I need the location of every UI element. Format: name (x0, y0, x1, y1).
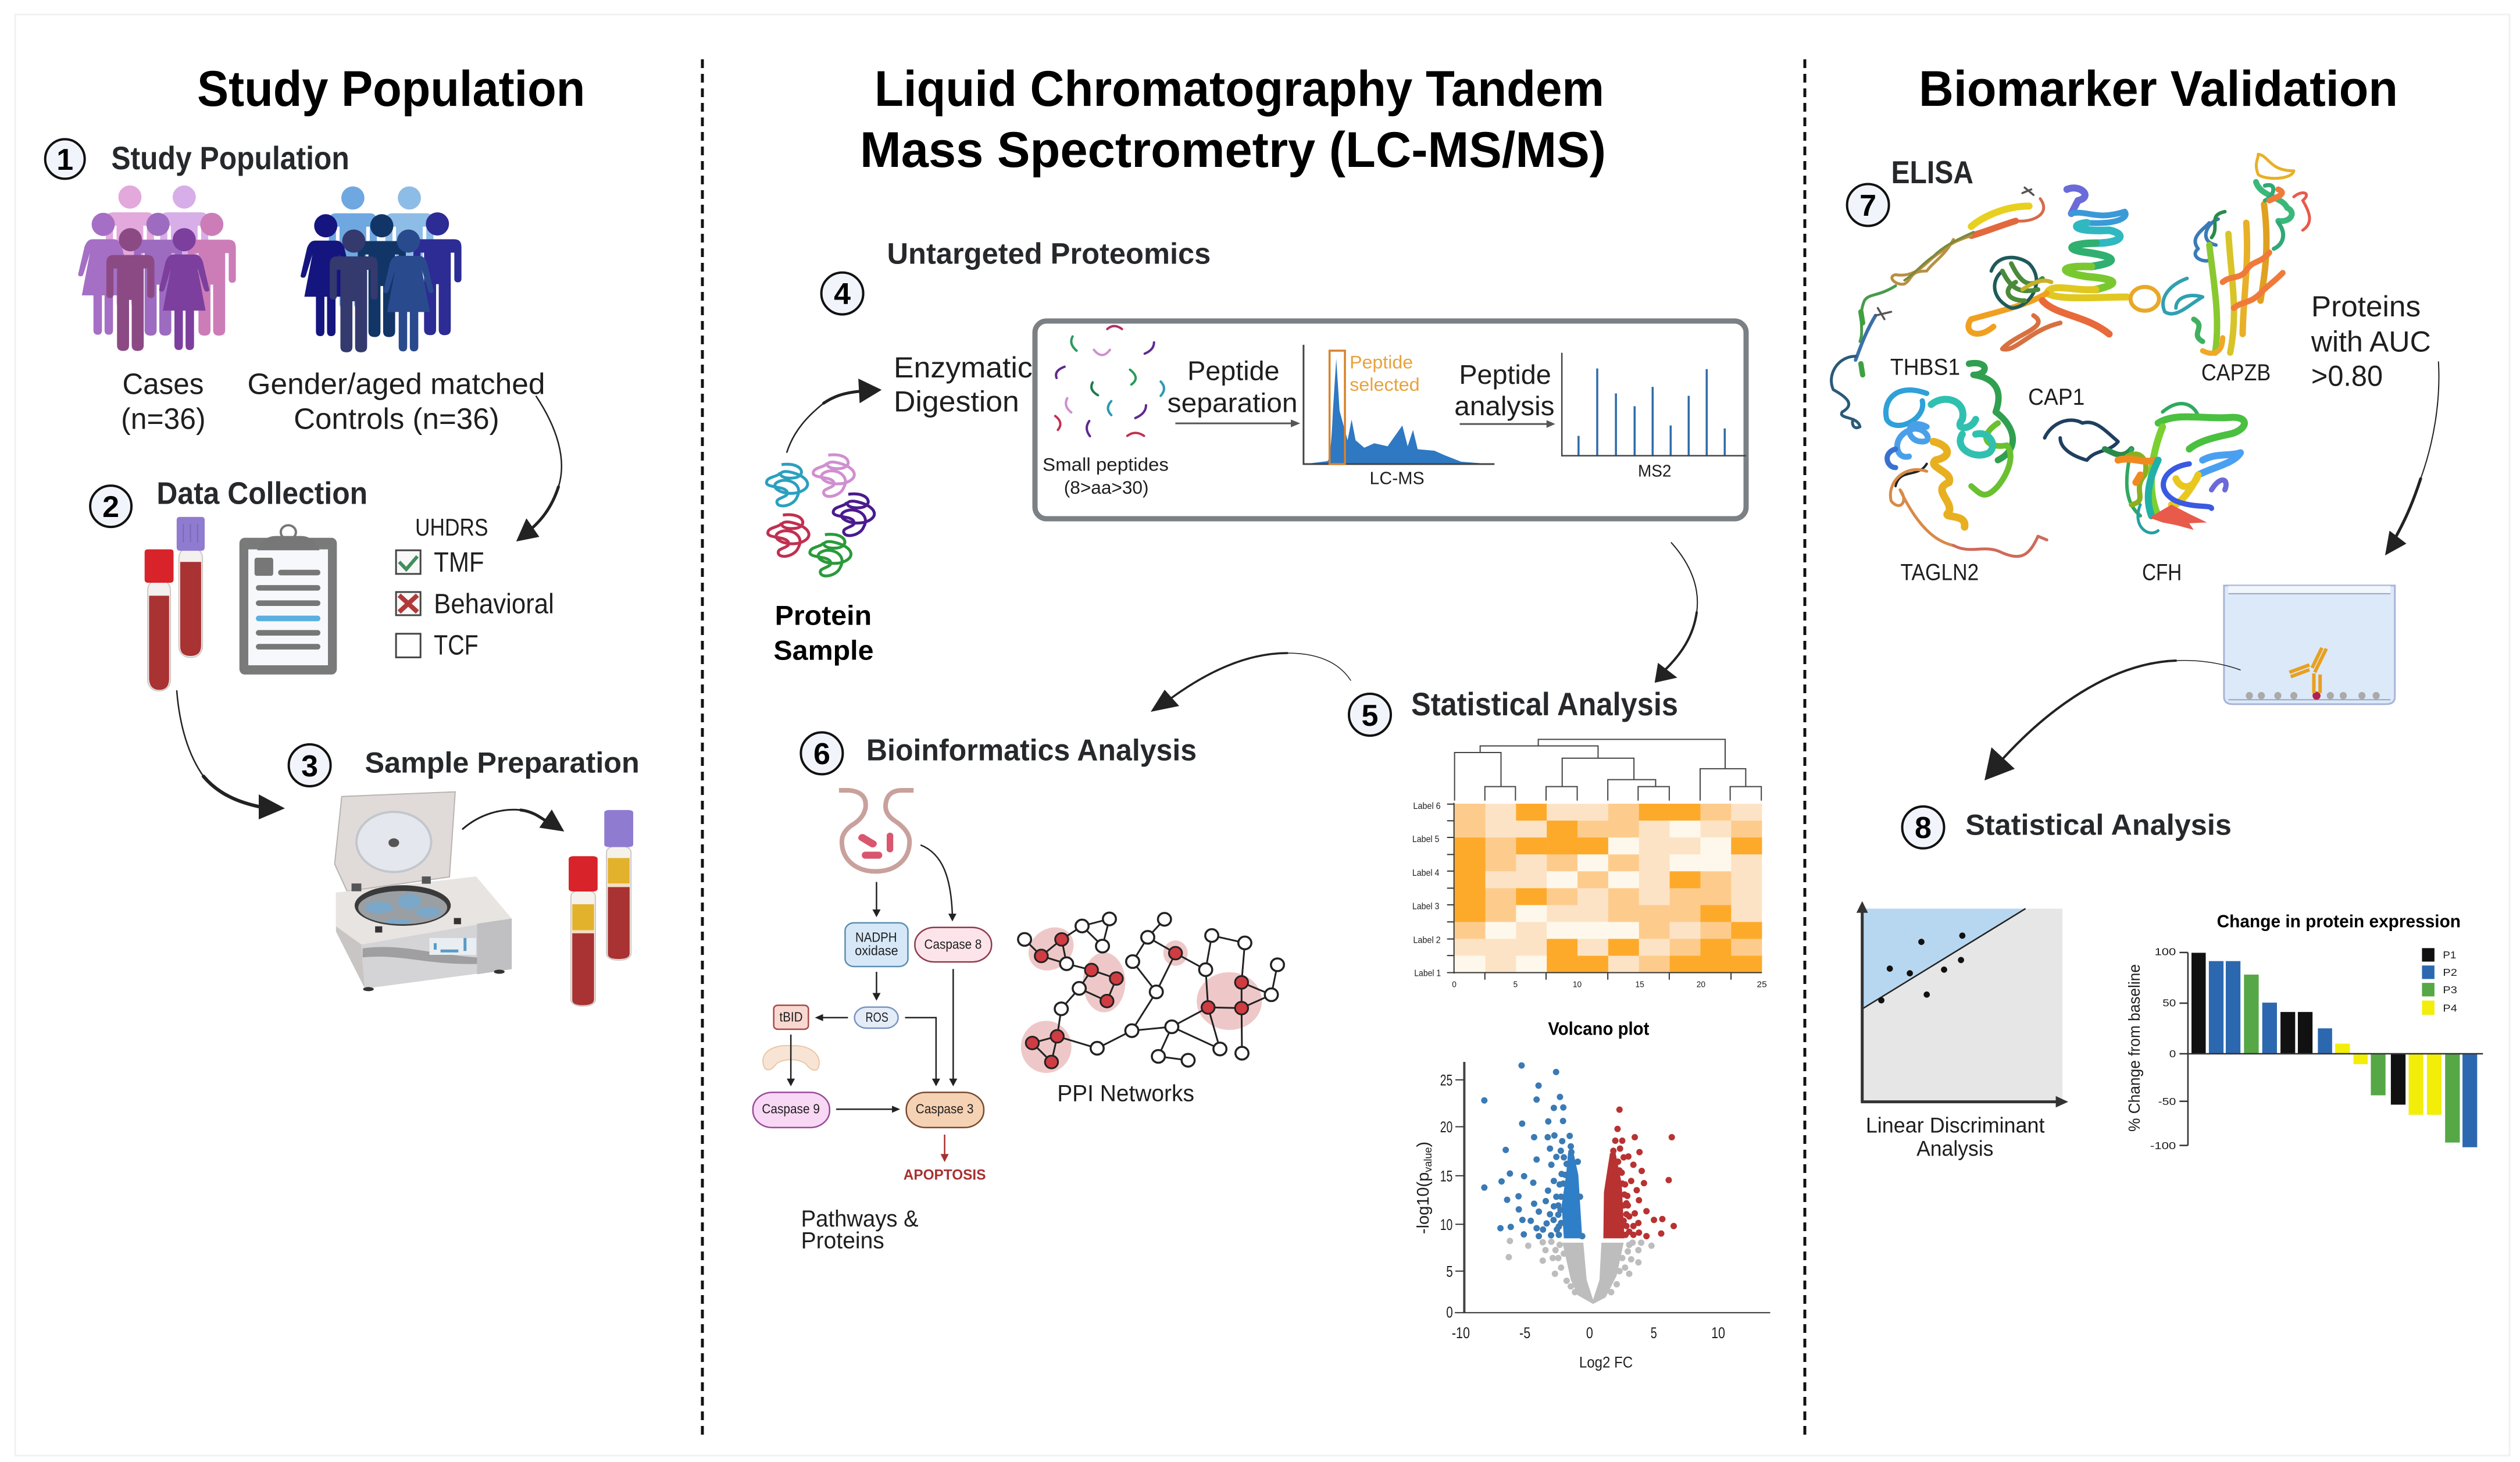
icon: cases group of people (78, 186, 236, 351)
number badge 2: 2 (102, 490, 119, 524)
volcano axes and tick labels: 0 (1446, 1303, 1453, 1321)
node: Caspase 9: Caspase 9 (762, 1101, 820, 1117)
number badge 8 (1903, 807, 1944, 848)
label: cases: Cases (122, 368, 204, 401)
label: TAGLN2: TAGLN2 (1901, 559, 1979, 585)
label: controls: Controls (n=36) (294, 402, 499, 436)
checklist: UHDRS: TCF (434, 630, 479, 661)
heatmap axes and labels: 5 (1514, 979, 1518, 989)
heading: ELISA: ELISA (1891, 154, 1973, 190)
chart: waterfall bars: -50 (2158, 1096, 2176, 1107)
arrow: protein sample to digestion (787, 379, 881, 452)
number badge 1 (45, 139, 85, 179)
node: NADPH oxidase (845, 923, 908, 967)
icon: blood collection tubes (145, 517, 205, 691)
volcano axes and tick labels: Log2 FC (1579, 1353, 1633, 1371)
node: ROS: ROS (866, 1010, 888, 1025)
heatmap axes and labels: 10 (1573, 979, 1582, 989)
checklist: UHDRS: UHDRS (415, 514, 488, 541)
volcano axes and tick labels: 0 (1586, 1324, 1593, 1342)
label: cases: (n=36) (121, 402, 206, 436)
icon: ELISA well with antibody (2224, 586, 2395, 704)
label: bar chart y axis: % Change from baseline (2125, 964, 2143, 1132)
node: NADPH oxidase: oxidase (855, 943, 898, 958)
label and arrow: peptide analysis (1454, 360, 1555, 428)
protein ribbon: CFH (2044, 404, 2244, 533)
label: Pathways and Proteins: Pathways & (801, 1206, 919, 1232)
volcano axes and tick labels: -10 (1452, 1324, 1470, 1342)
label: volcano y axis: -log10(p (1414, 1172, 1433, 1234)
heatmap axes and labels: 15 (1636, 979, 1644, 989)
number badge 2 (90, 486, 131, 527)
node: NADPH oxidase: NADPH (855, 930, 897, 945)
volcano axes and tick labels: 5 (1446, 1263, 1453, 1281)
checklist: UHDRS: Behavioral (434, 589, 554, 619)
panel: step 5 charts (1412, 739, 1770, 1371)
heatmap axes and labels: Label 1 (1414, 968, 1441, 978)
heatmap axes and labels: Label 4 (1412, 868, 1439, 878)
icon: mitochondrion (763, 1046, 819, 1070)
volcano axes and tick labels: 10 (1440, 1215, 1452, 1233)
panel: step 8 statistical analysis (1857, 808, 2483, 1161)
title: Liquid Chromatography Tandem Mass Spectrometry (860, 61, 1606, 178)
label: APOPTOSIS: APOPTOSIS (904, 1166, 986, 1183)
icon: controls group of people (301, 186, 462, 352)
number badge 8: 8 (1915, 811, 1932, 845)
icon: phagosome with bacteria (839, 790, 913, 871)
heatmap axes and labels: Label 2 (1413, 935, 1441, 945)
heading: Statistical Analysis: Statistical Analysis (1965, 808, 2232, 841)
node: Caspase 8 (915, 928, 991, 962)
chart: MS2 spectrum (1562, 353, 1746, 480)
heatmap axes and labels: 0 (1452, 979, 1457, 989)
label: controls (248, 368, 545, 436)
label and arrow: peptide separation: Peptide (1187, 356, 1280, 386)
chart: dendrogram (1455, 739, 1761, 801)
label: CFH: CFH (2142, 559, 2182, 585)
protein ribbon: CAP1 (1968, 188, 2159, 350)
arrow: controls to UHDRS (516, 397, 562, 541)
heatmap axes and labels: 25 (1757, 979, 1767, 989)
panel: step 7 ELISA (1832, 154, 2439, 704)
icon: small peptide fragments (1055, 326, 1164, 436)
label: cases (121, 368, 206, 436)
legend: P1 to P4: P1 (2443, 950, 2456, 961)
chart: waterfall bars: 100 (2155, 946, 2176, 958)
chart: waterfall bars: -100 (2150, 1140, 2176, 1151)
label: Proteins with AUC >0.80 (2311, 290, 2431, 393)
heading: step 2 Data Collection: Data Collection (156, 476, 367, 511)
panel: step 4 untargeted proteomics: separation (1168, 388, 1298, 418)
panel: step 4 untargeted proteomics: Sample (773, 636, 874, 666)
chart: MS2 spectrum: MS2 (1638, 462, 1671, 480)
panel: step 4 untargeted proteomics: Enzymatic (894, 351, 1033, 384)
label: Linear Discriminant Analysis: Analysis (1916, 1136, 1993, 1161)
icon: clipboard (240, 525, 337, 675)
panel: step 4 untargeted proteomics: analysis (1454, 391, 1555, 421)
node: tBID (774, 1005, 808, 1029)
heatmap axes and labels (1412, 801, 1767, 989)
chart: LC-MS chromatogram: LC-MS (1370, 469, 1425, 488)
arrow: caspase 3 to apoptosis (941, 1135, 949, 1162)
label: Proteins with AUC >0.80: Proteins (2311, 290, 2421, 323)
node: Caspase 3: Caspase 3 (916, 1101, 973, 1117)
arrow: workflow to statistical analysis (1655, 543, 1697, 683)
volcano axes and tick labels: 10 (1711, 1324, 1725, 1342)
arrow: statistical analysis to bioinformatics (1151, 653, 1351, 712)
number badge 5 (1349, 694, 1391, 736)
number badge 5: 5 (1362, 699, 1378, 733)
label: Enzymatic Digestion: Digestion (894, 386, 1019, 418)
label: Pathways and Proteins: Proteins (801, 1228, 884, 1254)
heatmap axes and labels: 20 (1697, 979, 1705, 989)
label: Enzymatic Digestion (894, 351, 1033, 418)
label: Linear Discriminant Analysis (1866, 1113, 2045, 1161)
heatmap axes and labels: Label 6 (1413, 801, 1441, 811)
chart: waterfall bars: 0 (2169, 1048, 2176, 1060)
volcano axes and tick labels: 5 (1651, 1324, 1657, 1342)
protein ribbon: CAPZB (2163, 154, 2310, 353)
label: Pathways and Proteins (801, 1206, 919, 1254)
heatmap axes and labels: Label 3 (1412, 901, 1439, 911)
panel: step 3 sample preparation (335, 746, 640, 1006)
volcano axes and tick labels: -5 (1519, 1324, 1530, 1342)
chart: LC-MS chromatogram: selected (1350, 374, 1420, 395)
number badge 4: 4 (834, 277, 851, 311)
number badge 6: 6 (813, 737, 830, 771)
number badge 7 (1847, 184, 1889, 226)
legend: P1 to P4: P4 (2443, 1003, 2457, 1014)
chart: heatmap (1455, 804, 1762, 973)
node: Caspase 8: Caspase 8 (925, 937, 981, 952)
node: tBID: tBID (779, 1010, 802, 1025)
panel: step 4 untargeted proteomics: Protein (775, 601, 872, 631)
chart: linear discriminant analysis (1857, 901, 2068, 1107)
chart: waterfall bars: 50 (2162, 997, 2176, 1009)
panel: step 4 untargeted proteomics: Peptide (1459, 360, 1551, 390)
label and arrow: peptide separation (1168, 356, 1300, 427)
arrow: centrifuge to separated tubes (463, 810, 564, 832)
label: Proteins with AUC >0.80: >0.80 (2311, 359, 2383, 393)
heading: Sample Preparation: Sample Preparation (365, 746, 640, 779)
label: Proteins with AUC >0.80: with AUC (2311, 325, 2431, 358)
number badge 4 (822, 273, 863, 315)
title: Biomarker Validation: Biomarker Validation (1919, 61, 2398, 117)
label: small peptides: (8>aa>30) (1064, 477, 1149, 498)
heading: Bioinformatics Analysis: Bioinformatics Analysis (866, 733, 1197, 767)
volcano axes and tick labels: 15 (1440, 1167, 1452, 1185)
chart: LC-MS chromatogram (1304, 345, 1494, 488)
heading: step 5 Statistical Analysis: Statistical Analysis (1411, 686, 1678, 722)
arrow: ELISA to statistical analysis (1984, 661, 2240, 780)
panel: step 4 untargeted proteomics: Small peptides (1043, 454, 1169, 475)
label: PPI Networks: PPI Networks (1057, 1081, 1194, 1107)
panel: step 4 untargeted proteomics: Untargeted Proteomics (887, 237, 1211, 270)
title: Liquid Chromatography Tandem Mass Spectrometry: Liquid Chromatography Tandem (874, 61, 1604, 117)
protein ribbon: THBS1 (1832, 187, 2044, 428)
volcano axes and tick labels: 20 (1440, 1118, 1452, 1136)
heading: Volcano plot: Volcano plot (1548, 1018, 1650, 1039)
chart: LC-MS chromatogram: Peptide (1350, 352, 1413, 373)
label: volcano y axis: value (1422, 1147, 1434, 1172)
checklist: UHDRS: TMF (434, 547, 484, 577)
label: THBS1: THBS1 (1890, 354, 1960, 380)
label: Linear Discriminant Analysis: Linear Discriminant (1866, 1113, 2045, 1137)
chart: PPI network (1018, 912, 1284, 1073)
number badge 7: 7 (1859, 189, 1876, 223)
node: ROS (855, 1007, 898, 1028)
number badge 1: 1 (56, 143, 73, 177)
chart: volcano plot points (1484, 1065, 1674, 1304)
panel: study population, steps 1 and 2 (78, 60, 585, 691)
label: Protein Sample (773, 601, 874, 666)
heatmap axes and labels: Label 5 (1412, 834, 1439, 844)
node: Caspase 9 (753, 1092, 830, 1128)
label: CAPZB: CAPZB (2201, 360, 2271, 386)
number badge 3: 3 (301, 750, 318, 783)
volcano axes and tick labels (1440, 1062, 1770, 1371)
title: Liquid Chromatography Tandem Mass Spectrometry: Mass Spectrometry (LC-MS/MS) (860, 122, 1606, 178)
arrow: tBID to caspase 9 (787, 1035, 795, 1086)
checklist: UHDRS (396, 514, 554, 661)
legend: P1 to P4: P3 (2443, 984, 2457, 996)
label: CAP1: CAP1 (2028, 384, 2084, 410)
number badge 3 (289, 744, 331, 786)
heading: step 1 Study Population: Study Population (111, 140, 349, 176)
arrow: data collection to sample preparation (177, 691, 285, 819)
arrow: proteins to ELISA well (2385, 362, 2439, 555)
volcano axes and tick labels: 25 (1440, 1071, 1452, 1089)
protein ribbon: TAGLN2 (1886, 363, 2047, 557)
title: Study Population: Study Population (197, 60, 585, 116)
icon: separated blood tubes (569, 810, 633, 1006)
legend: P1 to P4: P2 (2443, 967, 2457, 978)
legend: P1 to P4 (2422, 948, 2457, 1015)
node: Caspase 3 (906, 1092, 984, 1128)
panel: proteomics workflow box (1035, 321, 1746, 519)
panel: step 6 bioinformatics analysis (753, 733, 1284, 1254)
label: small peptides (1043, 454, 1169, 498)
chart: waterfall bars (2150, 946, 2483, 1151)
arrows: pathway connectors (815, 845, 957, 1112)
label: controls: Gender/aged matched (248, 368, 545, 401)
icon: centrifuge (335, 792, 512, 991)
label: volcano y axis: ) (1414, 1142, 1433, 1147)
icon: protein sample squiggles (766, 455, 874, 576)
number badge 6 (801, 732, 843, 774)
panel: step 4 untargeted proteomics (766, 237, 1746, 683)
